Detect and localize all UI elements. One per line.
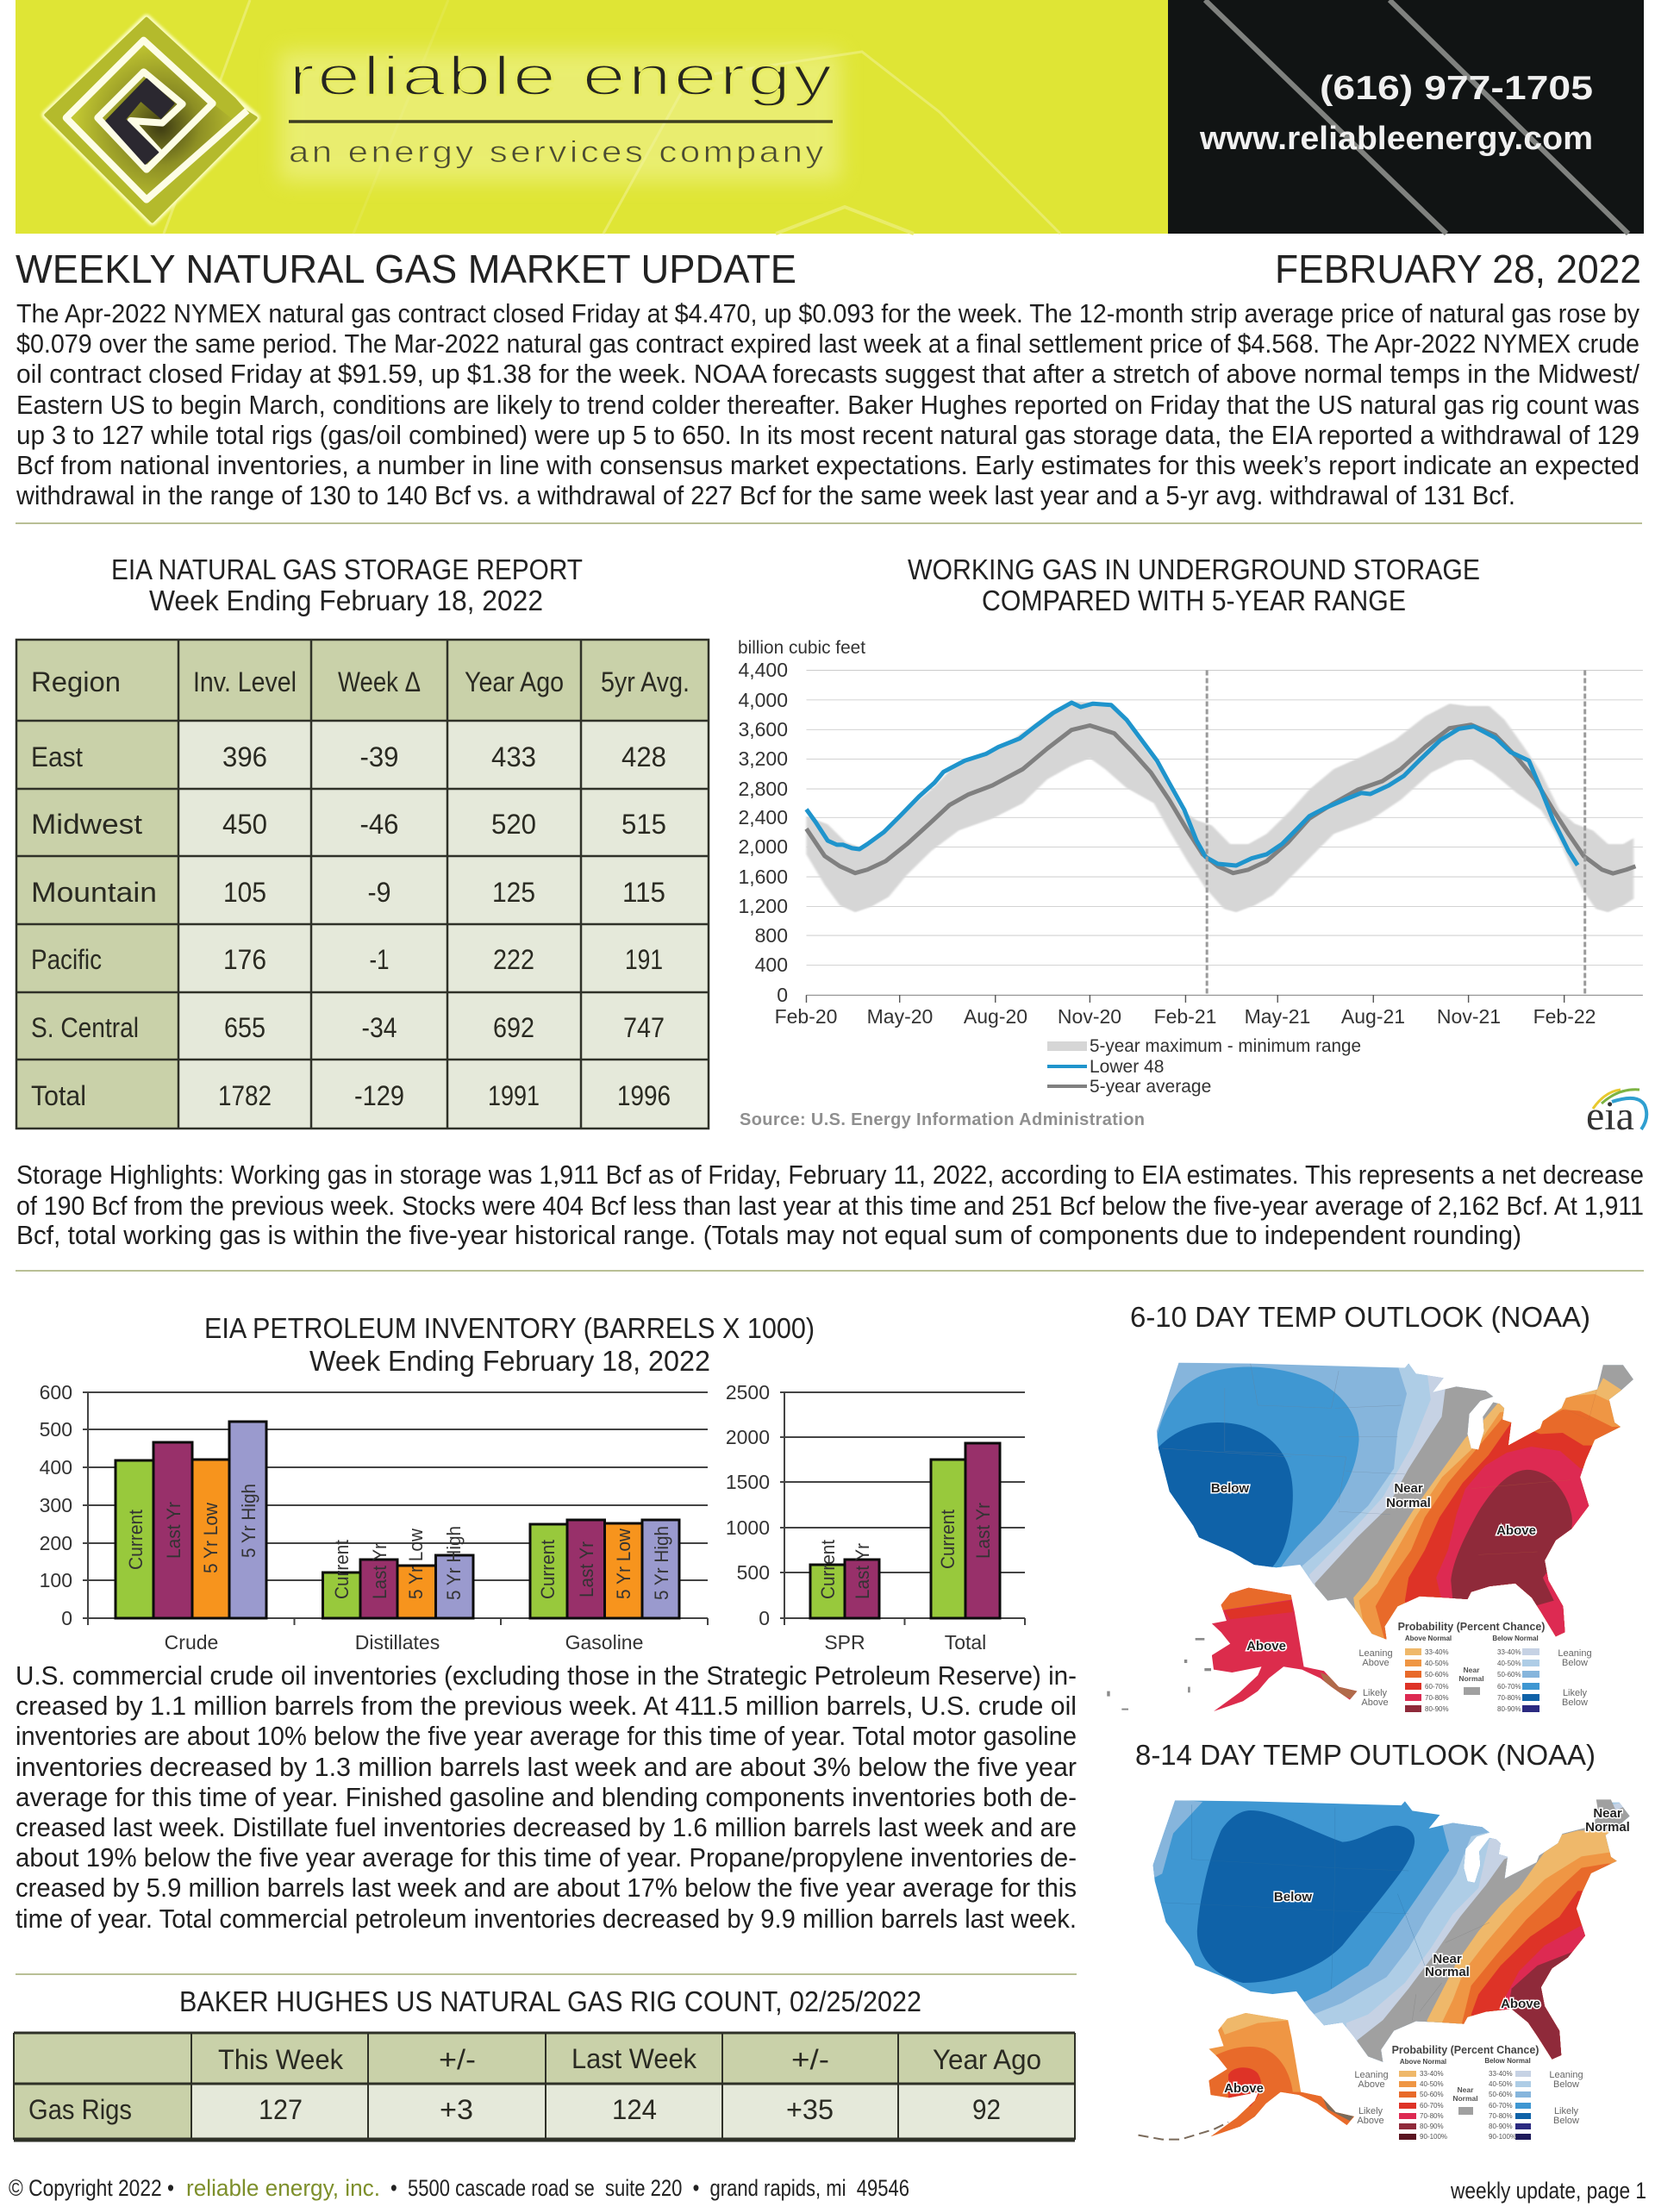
heading: working gas chart: WORKING GAS IN UNDERGROUND STORAGE (908, 553, 1480, 585)
bar chart: crude, distillates, gasoline: 200 (40, 1532, 72, 1554)
petroleum inventory text: inventories are about 10% below the five year average for this time of year. Total motor gasoline (16, 1721, 1077, 1751)
map legend: 8-14 day: Below Normal (1484, 2057, 1531, 2065)
map legend: 6-10 day: 60-70% (1425, 1683, 1449, 1691)
map: 6-10 day temperature outlook: Normal (1386, 1496, 1431, 1510)
market summary text: up 3 to 127 while total rigs (gas/oil combined) were up 5 to 650. In its most recent natural gas storage data, the EIA reported a withdrawal of 129 (16, 420, 1639, 450)
table: storage by region: 450 (222, 809, 267, 840)
map legend: 8-14 day: Above (1358, 2079, 1385, 2090)
map: 8-14 day temperature outlook: Above (1501, 1997, 1540, 2011)
line chart: working gas in storage: Aug-20 (964, 1005, 1027, 1028)
table: storage by region: Mountain (31, 877, 157, 908)
map legend: 6-10 day: 80-90% (1425, 1705, 1449, 1713)
map legend: 6-10 day: Likely (1363, 1688, 1388, 1698)
bar chart: SPR and total: 2000 (726, 1426, 770, 1448)
line chart: working gas in storage (738, 638, 1643, 1028)
map legend: 6-10 day: Probability (Percent Chance) (1398, 1621, 1545, 1633)
line chart: working gas in storage: 3,600 (738, 718, 788, 741)
line chart: working gas in storage: 2,800 (738, 778, 788, 800)
market summary text: withdrawal in the range of 130 to 140 Bcf vs. a withdrawal of 227 Bcf for the same week last year and a 5-yr avg. withdrawal of 131 Bcf. (16, 480, 1515, 510)
bar chart: crude, distillates, gasoline: Current (125, 1510, 147, 1570)
table: storage by region: Total (31, 1080, 86, 1111)
bar chart: crude, distillates, gasoline: 5 Yr High (443, 1526, 465, 1600)
bar chart: SPR and total: Total (945, 1631, 986, 1654)
company name: an energy services company (289, 135, 824, 169)
line chart: working gas in storage: Aug-21 (1341, 1005, 1405, 1028)
table: rig count: Year Ago (933, 2044, 1041, 2075)
petroleum inventory text: about 19% below the five year average for this time of year. Propane/propylene inventories de- (16, 1842, 1077, 1873)
table: storage by region: -9 (367, 877, 391, 908)
table: rig count: This Week (218, 2044, 344, 2075)
map legend: 6-10 day: 60-70% (1497, 1683, 1521, 1691)
table: rig count: 127 (259, 2094, 303, 2125)
petroleum inventory text: U.S. commercial crude oil inventories (excluding those in the Strategic Petroleum Reserve) in- (16, 1660, 1077, 1691)
line chart: working gas in storage: 1,200 (738, 895, 788, 917)
map: 8-14 day temperature outlook: Above (1224, 2081, 1264, 2096)
footer: copyright and address (9, 2175, 909, 2201)
map legend: 8-14 day: Near (1458, 2085, 1474, 2094)
chart legend (1047, 1036, 1361, 1097)
bar chart: crude, distillates, gasoline: Last Yr (576, 1541, 597, 1597)
table: rig count: 92 (972, 2094, 1001, 2125)
map legend: 6-10 day: 50-60% (1497, 1671, 1521, 1679)
source note: Source: U.S. Energy Information Administration (740, 1110, 1145, 1129)
table: storage by region: 176 (223, 944, 266, 975)
table: storage by region: 222 (493, 944, 534, 975)
bar chart: SPR and total: 0 (759, 1607, 770, 1629)
line chart: working gas in storage: 2,000 (738, 835, 788, 858)
line chart: working gas in storage: 1,600 (738, 866, 788, 888)
map legend: 6-10 day: Normal (1458, 1674, 1484, 1683)
table: rig count: +/- (791, 2044, 829, 2075)
petroleum inventory text: creased by 1.1 million barrels from the previous week. At 411.5 million barrels, U.S. crude oil (16, 1691, 1077, 1721)
table: storage by region: 655 (224, 1012, 265, 1043)
table: storage by region: 433 (491, 741, 536, 772)
map legend: 8-14 day: Likely (1358, 2106, 1383, 2116)
bar chart: crude, distillates, gasoline: 5 Yr High (238, 1484, 259, 1558)
map legend: 8-14 day: 70-80% (1420, 2112, 1444, 2120)
map: 8-14 day temperature outlook: Below (1274, 1890, 1312, 1904)
table: storage by region: 125 (492, 877, 535, 908)
bar chart: SPR and total: 2500 (726, 1381, 770, 1404)
table: storage by region: 115 (622, 877, 665, 908)
map legend: 8-14 day: 80-90% (1420, 2123, 1444, 2130)
bar chart: crude, distillates, gasoline: Current (537, 1540, 559, 1599)
bar chart: crude, distillates, gasoline (40, 1381, 708, 1654)
line chart: working gas in storage: Feb-20 (775, 1005, 837, 1028)
map legend: 6-10 day: Below Normal (1492, 1635, 1539, 1642)
map: 8-14 day temperature outlook: Near (1433, 1952, 1462, 1966)
table: storage by region: 1991 (488, 1080, 540, 1111)
contact details: www.reliableenergy.com (1199, 121, 1593, 157)
bar chart: SPR and total: Last Yr (972, 1503, 994, 1559)
table: rig count: +3 (440, 2094, 473, 2125)
table: rig count: +35 (786, 2094, 834, 2125)
map legend: 6-10 day: Below (1562, 1658, 1588, 1668)
table: storage by region: 191 (625, 944, 663, 975)
map: 8-14 day temperature outlook: Near (1593, 1806, 1622, 1821)
bar chart: crude, distillates, gasoline: Gasoline (565, 1631, 643, 1654)
map legend: 8-14 day: Above (1357, 2116, 1384, 2126)
table: storage by region: 520 (491, 809, 536, 840)
icon: company spiral logo (46, 19, 256, 222)
bar chart: crude, distillates, gasoline: 500 (40, 1418, 72, 1441)
bar chart: SPR and total: 1000 (726, 1516, 770, 1539)
bar chart: crude, distillates, gasoline: 400 (40, 1456, 72, 1479)
heading: petroleum inventory: Week Ending February 18, 2022 (309, 1345, 710, 1377)
chart legend: Lower 48 (1090, 1057, 1164, 1077)
chart legend: 5-year maximum - minimum range (1090, 1036, 1361, 1056)
table: rig count: 124 (612, 2094, 657, 2125)
line chart: working gas in storage: Feb-22 (1533, 1005, 1596, 1028)
bar chart: crude, distillates, gasoline: 5 Yr Low (405, 1529, 427, 1599)
bar chart: crude, distillates, gasoline: Last Yr (163, 1502, 184, 1559)
bar chart: crude, distillates, gasoline: 100 (40, 1569, 72, 1591)
table: storage by region: Pacific (31, 944, 102, 975)
map: 6-10 day temperature outlook: Below (1211, 1481, 1249, 1496)
table: storage by region: -34 (362, 1012, 397, 1043)
footer: copyright and address: © Copyright 2022 • (9, 2175, 174, 2201)
map legend: 6-10 day: 80-90% (1497, 1705, 1521, 1713)
map legend: 8-14 day: 90-100% (1420, 2133, 1447, 2141)
table: rig count: +/- (439, 2044, 476, 2075)
bar chart: crude, distillates, gasoline: Last Yr (369, 1543, 390, 1599)
bar chart: crude, distillates, gasoline: 600 (40, 1381, 72, 1404)
map legend: 6-10 day (1358, 1621, 1592, 1713)
map legend: 8-14 day: Below (1553, 2116, 1579, 2126)
footer: page number: weekly update, page 1 (1450, 2178, 1646, 2204)
line chart: working gas in storage: 4,400 (738, 659, 788, 681)
map legend: 8-14 day: Above Normal (1400, 2058, 1446, 2066)
map: 6-10 day temperature outlook: Above (1496, 1523, 1536, 1538)
bar chart: SPR and total: Last Yr (852, 1543, 873, 1599)
line chart: working gas in storage: billion cubic feet (738, 638, 865, 658)
line chart: working gas in storage: 2,400 (738, 806, 788, 828)
map legend: 8-14 day: 33-40% (1420, 2070, 1444, 2078)
petroleum inventory text: creased last week. Distillate fuel inventories decreased by 1.6 million barrels last week and are (16, 1812, 1077, 1842)
heading: working gas chart: COMPARED WITH 5-YEAR RANGE (982, 585, 1406, 616)
table: rig count: Gas Rigs (28, 2094, 132, 2125)
map legend: 8-14 day: 90-100% (1489, 2133, 1516, 2141)
map legend: 8-14 day (1354, 2044, 1583, 2141)
map legend: 8-14 day: Probability (Percent Chance) (1392, 2044, 1539, 2056)
table: storage by region: S. Central (31, 1012, 139, 1043)
footer: copyright and address: • 5500 cascade road se suite 220 • grand rapids, mi 49546 (390, 2175, 909, 2201)
table: storage by region: East (31, 741, 83, 772)
heading: storage report: Week Ending February 18, 2022 (149, 585, 543, 616)
heading: rig count: BAKER HUGHES US NATURAL GAS RIG COUNT, 02/25/2022 (179, 1985, 921, 2017)
map legend: 6-10 day: 40-50% (1497, 1660, 1521, 1667)
map legend: 8-14 day: 50-60% (1489, 2091, 1513, 2098)
petroleum inventory text: time of year. Total commercial petroleum inventories decreased by 9.9 million barrels last week. (16, 1904, 1077, 1934)
table: storage by region: 1782 (218, 1080, 272, 1111)
bar chart: SPR and total: 500 (737, 1561, 770, 1584)
line chart: working gas in storage: 0 (777, 984, 788, 1006)
map: 6-10 day temperature outlook: Above (1246, 1639, 1286, 1654)
contact details (1199, 70, 1593, 157)
map legend: 8-14 day: 60-70% (1420, 2102, 1444, 2110)
date: FEBRUARY 28, 2022 (1275, 247, 1641, 291)
petroleum inventory text: inventories decreased by 1.3 million barrels last week and are about 3% below the five year (16, 1752, 1077, 1782)
company name: reliable energy (289, 45, 833, 107)
table: storage by region: 5yr Avg. (601, 666, 690, 697)
heading: storage report: EIA NATURAL GAS STORAGE REPORT (111, 553, 583, 585)
contact details: (616) 977-1705 (1320, 70, 1593, 107)
table: storage by region: 428 (621, 741, 666, 772)
map legend: 6-10 day: Leaning (1558, 1648, 1592, 1659)
map legend: 6-10 day: Leaning (1358, 1648, 1393, 1659)
line chart: working gas in storage: Feb-21 (1154, 1005, 1216, 1028)
map legend: 6-10 day: Near (1464, 1666, 1480, 1674)
company name (289, 45, 833, 169)
table: storage by region: Inv. Level (193, 666, 297, 697)
table: storage by region: Midwest (31, 809, 142, 840)
table: storage by region: -46 (360, 809, 398, 840)
map legend: 8-14 day: 60-70% (1489, 2102, 1513, 2110)
map: 8-14 day temperature outlook: Normal (1585, 1820, 1630, 1835)
table: storage by region: Year Ago (465, 666, 564, 697)
line chart: working gas in storage: 3,200 (738, 747, 788, 770)
bar chart: crude, distillates, gasoline: Crude (165, 1631, 218, 1654)
bar chart: crude, distillates, gasoline: 5 Yr High (651, 1526, 672, 1600)
map legend: 8-14 day: 50-60% (1420, 2091, 1444, 2098)
map legend: 6-10 day: 70-80% (1425, 1694, 1449, 1702)
bar chart: crude, distillates, gasoline: 5 Yr Low (200, 1503, 222, 1573)
table: rig count (14, 2033, 1075, 2140)
storage highlights text: Bcf, total working gas is within the five-year historical range. (Totals may not equal sum of components due to independent rounding) (16, 1220, 1521, 1250)
heading: storage report (111, 553, 583, 616)
footer: copyright and address: reliable energy, inc. (186, 2175, 380, 2201)
table: storage by region: 105 (223, 877, 266, 908)
map: 8-14 day temperature outlook (1139, 1793, 1655, 2141)
bar chart: crude, distillates, gasoline: 5 Yr Low (613, 1529, 634, 1599)
map legend: 8-14 day: 80-90% (1489, 2123, 1513, 2130)
heading: 8-14 day outlook: 8-14 DAY TEMP OUTLOOK (NOAA) (1135, 1739, 1596, 1771)
petroleum inventory text: creased by 5.9 million barrels last week and are about 17% below the five year average for this (16, 1873, 1077, 1903)
table: storage by region (16, 640, 709, 1129)
heading: petroleum inventory: EIA PETROLEUM INVENTORY (BARRELS X 1000) (204, 1312, 815, 1344)
map legend: 8-14 day: 70-80% (1489, 2112, 1513, 2120)
heading: 6-10 day outlook: 6-10 DAY TEMP OUTLOOK (NOAA) (1130, 1301, 1590, 1333)
table: rig count: Last Week (571, 2043, 697, 2074)
map legend: 8-14 day: 40-50% (1489, 2080, 1513, 2088)
chart legend: 5-year average (1090, 1077, 1211, 1097)
map: 8-14 day temperature outlook: Normal (1425, 1965, 1470, 1979)
bar chart: SPR and total: SPR (824, 1631, 865, 1654)
map legend: 8-14 day: Leaning (1354, 2070, 1389, 2080)
bar chart: crude, distillates, gasoline: 300 (40, 1494, 72, 1516)
map legend: 8-14 day: Below (1553, 2079, 1579, 2090)
line chart: working gas in storage: 400 (755, 953, 788, 976)
line chart: working gas in storage: 800 (755, 924, 788, 947)
table: storage by region: 747 (623, 1012, 665, 1043)
line chart: working gas in storage: Nov-20 (1058, 1005, 1121, 1028)
table: storage by region: 396 (222, 741, 267, 772)
bar chart: SPR and total: Current (937, 1510, 959, 1569)
map legend: 8-14 day: Normal (1452, 2094, 1478, 2103)
table: storage by region: 692 (493, 1012, 534, 1043)
map legend: 6-10 day: Above Normal (1405, 1635, 1452, 1642)
title: WEEKLY NATURAL GAS MARKET UPDATE (16, 247, 796, 291)
bar chart: crude, distillates, gasoline: 0 (61, 1607, 72, 1629)
storage highlights text (16, 1160, 1644, 1250)
market summary text: Bcf from national inventories, a number in line with consensus market expectations. Early estimates for this week’s report indicate an expected (16, 450, 1639, 480)
map legend: 6-10 day: Above (1361, 1697, 1389, 1708)
table: storage by region: -129 (354, 1080, 404, 1111)
map legend: 8-14 day: 33-40% (1489, 2070, 1513, 2078)
table: storage by region: Week Δ (338, 666, 421, 697)
map legend: 6-10 day: Below (1562, 1697, 1588, 1708)
map: 6-10 day temperature outlook: Near (1394, 1481, 1423, 1496)
market summary text: oil contract closed Friday at $91.59, up $1.38 for the week. NOAA forecasts suggest that after a stretch of above normal temps in the Midwest/ (16, 359, 1639, 389)
bar chart: crude, distillates, gasoline: Current (331, 1540, 353, 1599)
map legend: 8-14 day: Leaning (1549, 2070, 1583, 2080)
map legend: 6-10 day: 33-40% (1425, 1648, 1449, 1656)
bar chart: SPR and total: Current (817, 1540, 839, 1599)
table: storage by region: 515 (621, 809, 666, 840)
table: storage by region: -1 (369, 944, 390, 975)
heading: petroleum inventory (204, 1312, 815, 1377)
map legend: 6-10 day: 50-60% (1425, 1671, 1449, 1679)
map: 6-10 day temperature outlook (1107, 1354, 1655, 1716)
icon: eia logo: eia (1586, 1093, 1634, 1139)
line chart: working gas in storage: Nov-21 (1437, 1005, 1501, 1028)
map legend: 8-14 day: 40-50% (1420, 2080, 1444, 2088)
table: storage by region: Region (31, 666, 121, 697)
table: storage by region: -39 (360, 741, 398, 772)
table: storage by region: 1996 (617, 1080, 671, 1111)
market summary text (16, 298, 1639, 510)
header banner (16, 0, 1644, 234)
bar chart: SPR and total (726, 1381, 1025, 1654)
map legend: 8-14 day: Likely (1554, 2106, 1579, 2116)
map legend: 6-10 day: 70-80% (1497, 1694, 1521, 1702)
petroleum inventory text (16, 1660, 1077, 1934)
petroleum inventory text: average for this time of year. Finished gasoline and blending components inventories both de- (16, 1782, 1077, 1812)
map legend: 6-10 day: 40-50% (1425, 1660, 1449, 1667)
line chart: working gas in storage: May-20 (867, 1005, 933, 1028)
line chart: working gas in storage: 4,000 (738, 689, 788, 711)
map legend: 6-10 day: Above (1362, 1658, 1390, 1668)
bar chart: SPR and total: 1500 (726, 1471, 770, 1493)
map legend: 6-10 day: 33-40% (1497, 1648, 1521, 1656)
line chart: working gas in storage: May-21 (1245, 1005, 1310, 1028)
map legend: 6-10 day: Likely (1563, 1688, 1588, 1698)
heading: working gas chart (908, 553, 1480, 616)
bar chart: crude, distillates, gasoline: Distillates (355, 1631, 440, 1654)
